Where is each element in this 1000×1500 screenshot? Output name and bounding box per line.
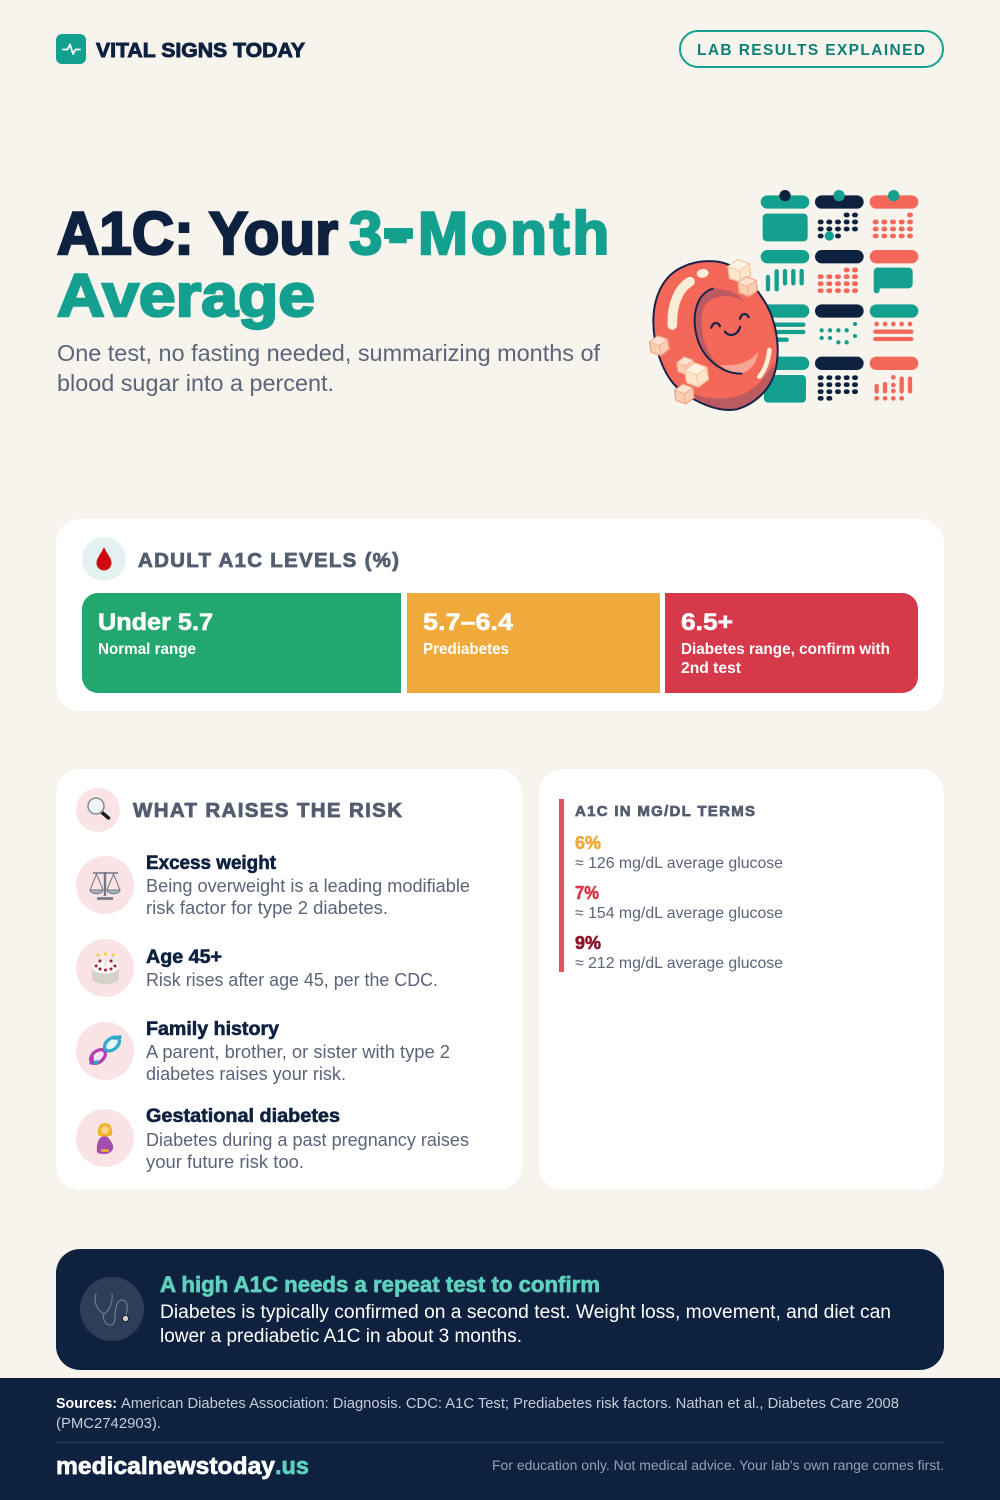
- band: prediabetes: Prediabetes: [423, 641, 509, 658]
- footer: [0, 1378, 1000, 1500]
- conversion: 7%: 7%: [575, 883, 599, 903]
- panel: what raises the risk: [56, 769, 522, 1190]
- callout banner: Diabetes is typically confirmed on a second test. Weight loss, movement, and diet can: [160, 1302, 891, 1323]
- subtitle: One test, no fasting needed, summarizing months of: [57, 340, 601, 366]
- subtitle: blood sugar into a percent.: [57, 370, 334, 396]
- risk item: age 45+: [76, 939, 438, 997]
- band: diabetes: [665, 593, 918, 693]
- title: Average: [57, 262, 315, 329]
- sources: [56, 1396, 899, 1432]
- band: diabetes: Diabetes range, confirm with: [681, 641, 890, 658]
- heading: ADULT A1C LEVELS (%): [138, 549, 399, 572]
- disclaimer: For education only. Not medical advice. Your lab's own range comes first.: [492, 1458, 944, 1473]
- title: Month: [418, 200, 612, 267]
- badge: lab results explained: [680, 31, 943, 67]
- brand logo: VITAL SIGNS TODAY: [96, 39, 305, 62]
- heading: A1C IN MG/DL TERMS: [575, 803, 755, 820]
- sources: American Diabetes Association: Diagnosis. CDC: A1C Test; Prediabetes risk factors. Nathan et al., Diabetes Care 2008: [121, 1396, 899, 1412]
- footer brand: medicalnewstoday: [56, 1453, 275, 1480]
- title: 3: [349, 200, 382, 267]
- panel: A1C in mg/dL terms: [539, 769, 944, 1190]
- conversion: 9%: [575, 933, 783, 972]
- icon: blood drop: [82, 537, 126, 581]
- title: -: [388, 200, 408, 267]
- risk item: gestational diabetes: Diabetes during a past pregnancy raises: [146, 1130, 469, 1150]
- conversion: 6%: 6%: [575, 833, 601, 853]
- conversion: 9%: ≈ 212 mg/dL average glucose: [575, 955, 783, 972]
- band: diabetes: 2nd test: [681, 660, 741, 677]
- band: normal: [82, 593, 401, 693]
- risk item: gestational diabetes: your future risk too.: [146, 1152, 304, 1172]
- risk item: age 45+: Age 45+: [146, 946, 222, 968]
- conversion: 7%: ≈ 154 mg/dL average glucose: [575, 905, 783, 922]
- subtitle: [57, 340, 601, 396]
- conversion: 6%: [575, 833, 783, 872]
- risk item: family history: A parent, brother, or sister with type 2: [146, 1042, 450, 1062]
- risk item: age 45+: Risk rises after age 45, per the CDC.: [146, 970, 438, 990]
- risk item: gestational diabetes: Gestational diabetes: [146, 1105, 340, 1127]
- face: [711, 314, 749, 335]
- band: normal: Normal range: [98, 641, 196, 658]
- icon: stethoscope: [80, 1277, 144, 1341]
- illustration: calendars and smiling red blood cell with sugar cubes: [649, 190, 918, 413]
- callout banner: lower a prediabetic A1C in about 3 months.: [160, 1326, 522, 1347]
- icon: magnifying glass: [76, 788, 120, 832]
- conversion: 6%: ≈ 126 mg/dL average glucose: [575, 855, 783, 872]
- sources: (PMC2742903).: [56, 1416, 161, 1432]
- band: prediabetes: 5.7–6.4: [423, 609, 513, 636]
- sources: Sources:: [56, 1396, 117, 1412]
- panel: adult A1C levels: [56, 519, 944, 711]
- heading: WHAT RAISES THE RISK: [133, 799, 402, 822]
- risk item: excess weight: Excess weight: [146, 852, 276, 874]
- brand logo: [56, 34, 305, 64]
- risk item: family history: [76, 1018, 450, 1084]
- callout banner: A high A1C needs a repeat test to confirm: [160, 1272, 600, 1297]
- callout banner: [56, 1249, 944, 1370]
- risk item: excess weight: Being overweight is a leading modifiable: [146, 876, 470, 896]
- badge: lab results explained: LAB RESULTS EXPLAINED: [697, 42, 925, 59]
- band: diabetes: 6.5+: [681, 609, 733, 636]
- risk item: family history: diabetes raises your risk.: [146, 1064, 346, 1084]
- red blood cell character: [649, 258, 783, 413]
- conversion: 7%: [575, 883, 783, 922]
- risk item: excess weight: risk factor for type 2 diabetes.: [146, 898, 388, 918]
- title: A1C: Your: [57, 200, 338, 267]
- sugar cubes: [649, 258, 758, 405]
- title: [57, 200, 612, 329]
- highlights: [672, 282, 769, 377]
- risk item: excess weight: [76, 852, 470, 918]
- risk item: gestational diabetes: [76, 1105, 469, 1172]
- dimple: [695, 288, 745, 373]
- risk item: family history: Family history: [146, 1018, 279, 1040]
- calendar grid: [761, 190, 918, 403]
- band: prediabetes: [407, 593, 660, 693]
- conversion: 9%: 9%: [575, 933, 601, 953]
- footer brand: .us: [275, 1453, 309, 1480]
- band: normal: Under 5.7: [98, 609, 213, 636]
